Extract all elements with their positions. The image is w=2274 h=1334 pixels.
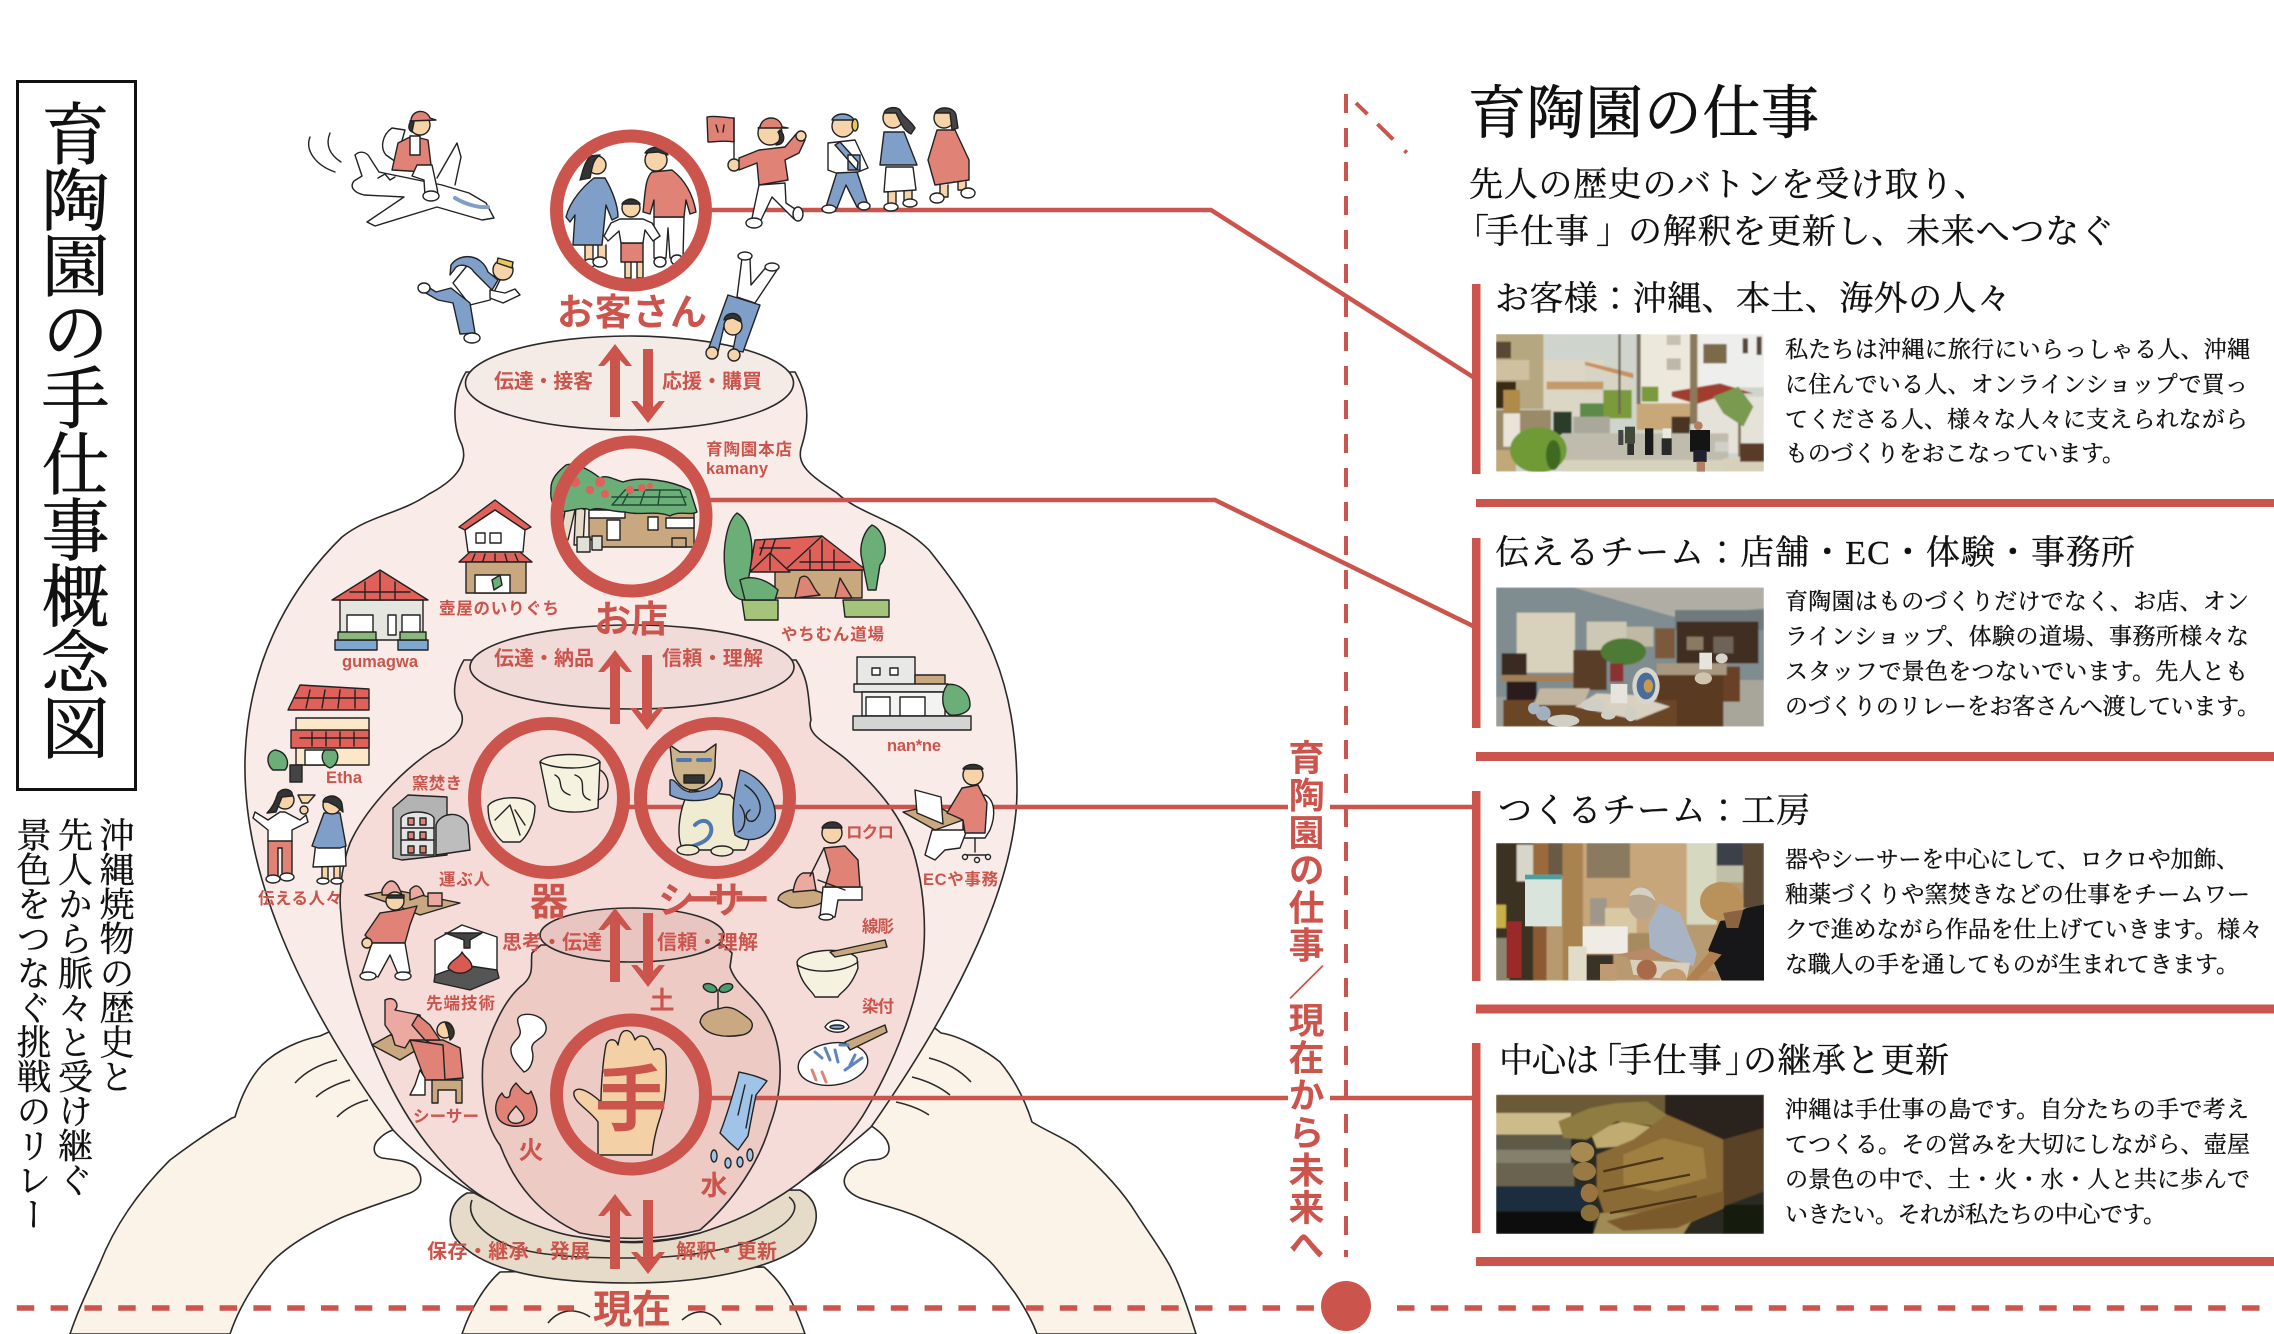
photo: street [1496,334,1764,473]
arrows: hand to present [598,1194,665,1274]
person body under pot [462,1267,805,1334]
illustration: blue painted plate [795,1020,887,1090]
connector: customers [705,210,1473,377]
right heading: の解釈を更新し、未来へつなぐ [1628,213,2114,251]
divider [1476,1257,2274,1266]
illustration: cups [488,754,608,842]
relation labels: 伝達・接客 [494,370,593,393]
body text: 器やシーサーを中心にして、ロクロや加飾、 [1785,847,2239,872]
small place labels: nan*ne [887,737,941,755]
present timeline dashed line [17,1305,2266,1311]
layer labels: 土 [649,987,675,1015]
body text: クで進めながら作品を仕上げていきます。様々 [1785,917,2263,942]
arrows: workshop to hand [598,908,665,987]
outer pot: customers layer [245,336,1017,1243]
illustration: EC and office worker [903,764,994,862]
illustration: fire [496,1083,537,1126]
small place labels: 染付 [862,997,894,1016]
concept description: 沖縄焼物の歴史と [95,817,134,1093]
small place labels: gumagwa [342,653,419,671]
body text: 沖縄は手仕事の島です。自分たちの手で考え [1785,1097,2249,1122]
body text: てくださる人、様々な人々に支えられながら [1785,407,2248,432]
relation labels: 応援・購買 [662,370,762,393]
illustration: pottery wheel worker [778,822,862,920]
relation labels: 伝達・納品 [494,647,594,670]
panel: communicating team: 伝えるチーム：店舗・EC・体験・事務所 [1495,534,2135,572]
body text [1785,589,2260,719]
connector: workshop [625,805,1474,809]
right heading: 育陶園の仕事 [1468,81,1819,146]
layer labels: お店 [594,599,668,640]
layer labels: 火 [518,1137,544,1165]
body text: のづくりのリレーをお客さんへ渡しています。 [1785,694,2260,719]
concept description [12,817,134,1231]
illustration: shisa sculptor [372,999,463,1103]
illustration: traveller on airplane [309,111,494,226]
right heading: 手仕事 [1485,213,1589,251]
illustration: handstanding person [706,252,779,361]
left hand [70,1000,460,1334]
body text: ラインショップ、体験の道場、事務所様々な [1785,624,2249,649]
future timeline dashed line [1346,94,1407,1257]
heading: handcraft core: 手仕事 [1618,1042,1722,1080]
layer labels [518,292,770,1332]
body text [1785,337,2250,466]
small place labels: 先端技術 [426,994,495,1013]
illustration: soil and sprout [700,982,752,1036]
circle: shop [557,442,706,591]
relation labels: 信頼・理解 [662,647,763,670]
illustration: Etha building [268,685,369,782]
layer labels: 器 [530,882,568,924]
body text: 私たちは沖縄に旅行にいらっしゃる人、沖縄 [1785,337,2250,362]
small place labels: ロクロ [846,823,894,842]
photo: workshop [1496,843,1764,981]
illustration: family in circle [566,147,696,278]
arrows: customers to shop [598,344,665,423]
right heading: 「 [1455,213,1489,251]
photo: shop interior [1496,587,1764,727]
body text: な職人の手を通してものが生まれてきます。 [1785,952,2239,977]
circle: hand [556,1020,706,1169]
layer labels: 水 [700,1171,728,1201]
circle: ware [474,724,624,872]
small place labels: 育陶園本店 [706,440,792,459]
pedestal ring [450,1190,816,1283]
panel: communicating team [1472,534,2260,728]
body text: ものづくりをおこなっています。 [1785,441,2125,466]
body text: の景色の中で、土・火・水・人と共に歩んで [1785,1167,2250,1192]
body text [1785,1097,2250,1227]
connector: shop [705,500,1473,626]
divider [1476,499,2274,507]
heading: handcraft core: 中心は [1499,1042,1599,1080]
right hand [820,1000,1196,1334]
concept description: 景色をつなぐ挑戦のリレー [12,817,51,1231]
small place labels: 壺屋のいりぐち [439,599,559,618]
illustration: customers group walking [707,108,975,228]
relation labels: 信頼・理解 [657,931,758,954]
right heading: 先人の歴史のバトンを受け取り、 [1469,166,1988,204]
connector: handcraft [705,1096,1474,1100]
illustration: carved bowl [797,940,887,997]
illustration: kamany shop [551,464,697,552]
small place labels: シーサー [413,1108,479,1126]
relation labels [427,370,777,1263]
circle: shisa [640,724,790,872]
timeline origin dot [1321,1281,1371,1331]
body text [1785,847,2263,977]
small place labels: Etha [326,769,363,787]
layer labels: シーサー [658,880,770,921]
small place labels: ECや事務 [923,870,998,889]
illustration: hand [574,1031,666,1155]
small place labels: 運ぶ人 [439,870,490,889]
panel: making team [1472,791,2263,981]
small place labels: 窯焚き [412,774,462,793]
illustration: 3D printer [434,925,499,990]
illustration: smoke [511,1014,546,1072]
body text: いきたい。それが私たちの中心です。 [1785,1202,2166,1227]
illustration: person carrying pots [360,881,460,980]
small place labels: 線彫 [862,917,894,936]
illustration: Tsuboya entrance house [459,500,532,593]
body text: 育陶園はものづくりだけでなく、お店、オン [1785,589,2249,614]
illustration: yachimun dojo [724,513,889,620]
heading: handcraft core: 」 [1725,1043,1759,1080]
panel: customers [1472,280,2250,474]
small place labels: kamany [706,460,769,478]
relation labels: 思考・伝達 [502,931,602,954]
concept description: 先人から脈々と受け継ぐ [54,817,92,1196]
right heading: 」 [1596,214,1630,251]
arrows: shop to workshop [598,650,664,730]
middle pot: shop layer [340,625,924,1242]
title box [18,82,136,790]
small place labels: やちむん道場 [781,625,884,644]
panel: customers: お客様：沖縄、本土、海外の人々 [1495,280,2011,318]
relation labels: 解釈・更新 [676,1240,777,1263]
layer labels: 現在 [593,1289,671,1332]
body text: に住んでいる人、オンラインショップで買っ [1785,372,2248,397]
illustration: kiln [393,795,470,860]
illustration: gumagwa house [332,570,428,650]
small place labels [258,440,998,1126]
title box: 育陶園の手仕事概念図 [32,99,108,759]
heading: handcraft core [1499,1042,1949,1080]
right heading [1455,81,2114,251]
body text: 釉薬づくりや窯焚きなどの仕事をチームワー [1785,882,2250,907]
timeline label: 育陶園の仕事／現在から未来へ [1284,739,1324,1264]
layer labels: 手 [595,1061,667,1141]
illustration: water [711,1072,767,1168]
illustration: nan*ne building [853,657,971,730]
heading: handcraft core: の継承と更新 [1743,1042,1949,1080]
heading: handcraft core: 「 [1588,1042,1622,1080]
body text: てつくる。その営みを大切にしながら、壺屋 [1785,1132,2250,1157]
illustration: shisa lion [670,744,775,856]
panel: handcraft core [1472,1042,2250,1234]
illustration: two staff members [253,789,346,884]
relation labels: 保存・継承・発展 [427,1240,590,1263]
illustration: running person [418,257,520,343]
panel: making team: つくるチーム：工房 [1498,793,1810,830]
circle: customers [556,136,706,285]
photo: hands on clay [1496,1095,1764,1234]
inner pot: handcraft layer [482,908,780,1238]
layer labels: お客さん [557,292,707,333]
small place labels: 伝える人々 [258,889,342,908]
body text: スタッフで景色をつないでいます。先人とも [1785,659,2248,684]
divider [1476,1004,2274,1014]
divider [1476,752,2274,761]
